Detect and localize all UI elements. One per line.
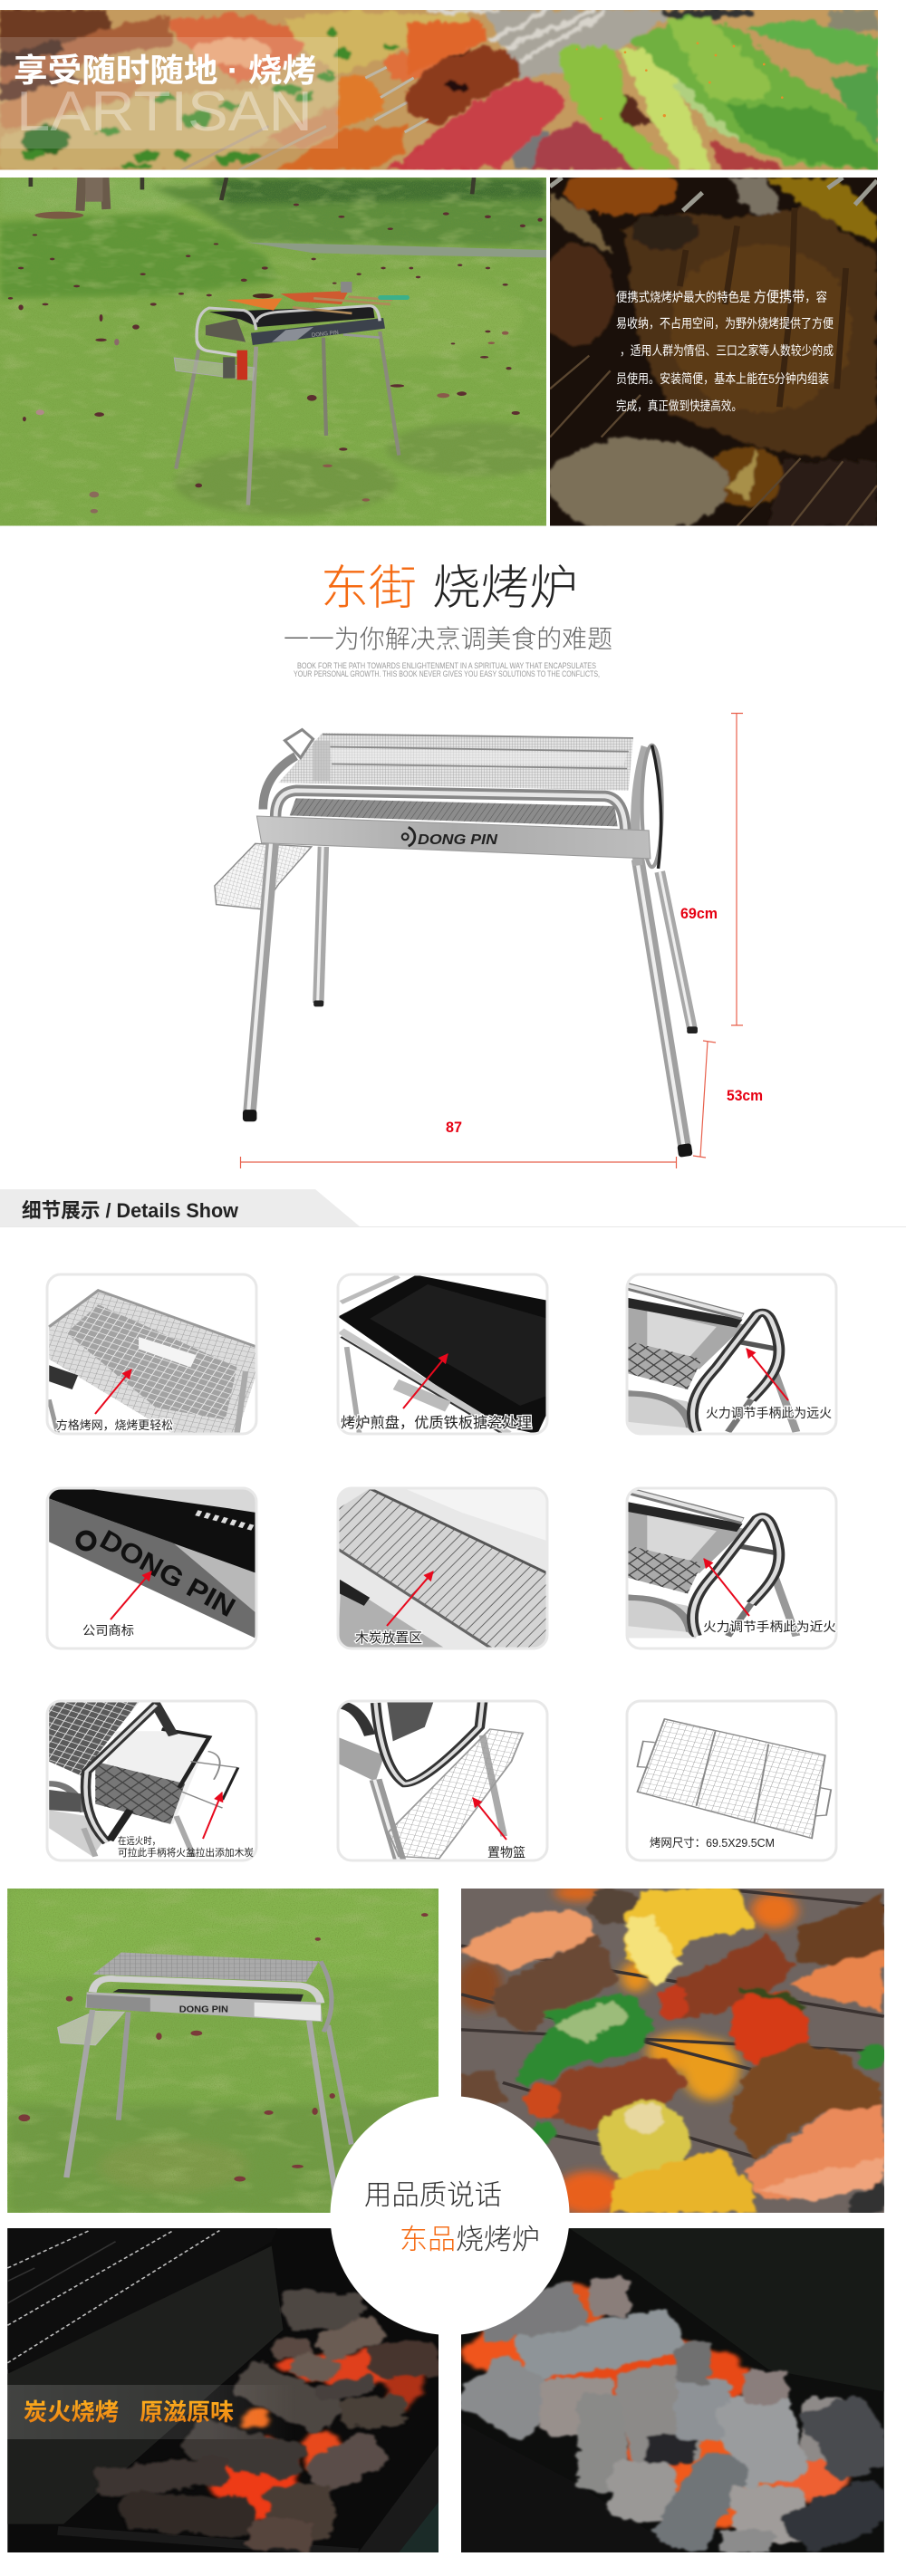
slogan: 原滋原味 [140, 2398, 234, 2426]
wheel and back arch [635, 745, 662, 869]
photo: skewers on grill [457, 1884, 887, 2215]
beef left [461, 2070, 506, 2105]
product illustration: stainless grill [215, 730, 698, 1158]
sausage 2 [525, 2056, 688, 2131]
logo: DONG PIN [418, 832, 498, 848]
panel: charcoal zone detail [337, 1487, 548, 1649]
banner watermark: LARTISAN [16, 81, 313, 143]
caption: 木炭放置区 [355, 1630, 422, 1646]
logo [402, 827, 498, 848]
legs [243, 843, 698, 1158]
logo text: DONG PIN [95, 1524, 240, 1623]
english blurb: BOOK FOR THE PATH TOWARDS ENLIGHTENMENT IN A SPIRITUAL WAY THAT ENCAPSULATES [297, 661, 596, 670]
grill: DONG PIN [179, 2005, 228, 2014]
heading: subtitle: 一一为你解决烹调美食的难题 [284, 625, 612, 653]
grate drawing [637, 1719, 831, 1839]
section header: details show [0, 1189, 906, 1226]
basket [215, 843, 312, 909]
charcoal rack [290, 798, 618, 826]
center circle badge [330, 2096, 569, 2335]
banner: grilled food photo with title [0, 10, 879, 170]
caption: 公司商标 [82, 1623, 134, 1638]
panel: company logo detail [46, 1487, 257, 1649]
dimension: depth: 53cm [727, 1087, 763, 1104]
english blurb [294, 661, 600, 678]
heading: product title [321, 562, 578, 615]
arrow [704, 1559, 749, 1616]
caption: 火力调节手柄此为远火 [706, 1406, 832, 1420]
steak [491, 1935, 622, 2032]
section header: details show: 细节展示 / Details Show [22, 1199, 239, 1222]
description text [616, 289, 834, 413]
arrow [473, 1798, 506, 1840]
grill in lawn photo: DONG PIN [312, 330, 339, 339]
english blurb: YOUR PERSONAL GROWTH. THIS BOOK NEVER GIVES YOU EASY SOLUTIONS TO THE CONFLICTS, [294, 669, 600, 678]
dimension: depth [693, 1041, 763, 1158]
onion [599, 2100, 689, 2184]
panel: pull-out fire tray [46, 1700, 257, 1861]
panel: enamel tray detail [337, 1274, 548, 1435]
caption: 烤网尺寸：69.5X29.5CM [650, 1836, 775, 1850]
sausage [661, 1935, 795, 2019]
slogan [24, 2398, 234, 2426]
photo: grill on the lawn [0, 178, 568, 526]
panel: description on dark food photo [539, 167, 877, 533]
slogan: 炭火烧烤 [24, 2398, 119, 2426]
tomato [728, 1990, 809, 2065]
arrow [747, 1349, 788, 1400]
dimension: height [680, 714, 743, 1025]
dimension: width [241, 1119, 676, 1168]
description text: 完成，真正做到快捷高效。 [616, 399, 742, 413]
shrimp right [789, 1950, 884, 2012]
beef right [731, 2043, 884, 2158]
corn 2 [610, 2148, 757, 2213]
panel: heat handle far [626, 1274, 837, 1435]
panel: mesh grate detail [46, 1274, 257, 1435]
banner title: 享受随时随地 · 烧烤 [14, 52, 316, 89]
caption: 可拉此手柄将火盆拉出添加木炭 [118, 1846, 254, 1859]
arrow [111, 1572, 151, 1620]
front panel [256, 816, 651, 859]
dimension: height: 69cm [680, 905, 718, 922]
arrow [387, 1572, 433, 1626]
description text: 便携式烧烤炉最大的特色是 方便携带，容 [616, 289, 827, 305]
panel: heat handle near [626, 1487, 837, 1649]
caption band [7, 2385, 297, 2439]
photo: charcoal burning right [452, 2228, 903, 2557]
mesh grate [263, 730, 633, 809]
grill [58, 1953, 352, 2193]
shrimp bottom right [743, 2107, 884, 2199]
panel: storage basket detail [337, 1700, 548, 1861]
panel: grate size [627, 1701, 836, 1860]
caption: 在远火时， [118, 1835, 160, 1847]
pepper small [529, 2122, 557, 2145]
grill in lawn photo [174, 282, 410, 505]
photo: folded grill on grass [7, 1889, 439, 2213]
caption: 置物篮 [487, 1845, 525, 1860]
dimension: width: 87 [446, 1119, 462, 1136]
description text: 员使用。安装简便，基本上能在5分钟内组装 [616, 371, 829, 386]
pepper [511, 1992, 656, 2087]
corn [624, 1889, 754, 1988]
shrimp 1 [462, 1910, 595, 1970]
caption: 方格烤网，烧烤更轻松 [56, 1418, 173, 1432]
heading: product title: 东街 [321, 562, 417, 615]
heading: product title: 烧烤炉 [432, 562, 578, 615]
beef top right [795, 1893, 884, 1964]
arrow [95, 1370, 131, 1414]
caption: 火力调节手柄此为近火 [703, 1620, 836, 1634]
description text: 易收纳，不占用空间，为野外烧烤提供了方便 [616, 316, 834, 331]
description text: ，适用人群为情侣、三口之家等人数较少的成 [620, 343, 834, 358]
photo: charcoal burning left [7, 2228, 439, 2552]
badge line 1: 用品质说话 [364, 2179, 502, 2211]
arrow [403, 1354, 448, 1408]
tube arch [275, 791, 625, 830]
caption: 烤炉煎盘，优质铁板搪瓷处理 [341, 1414, 532, 1431]
badge line 2: 东品烧烤炉 [400, 2224, 540, 2255]
arrow [203, 1793, 222, 1839]
caption [118, 1835, 254, 1859]
banner overlay band [0, 37, 338, 149]
